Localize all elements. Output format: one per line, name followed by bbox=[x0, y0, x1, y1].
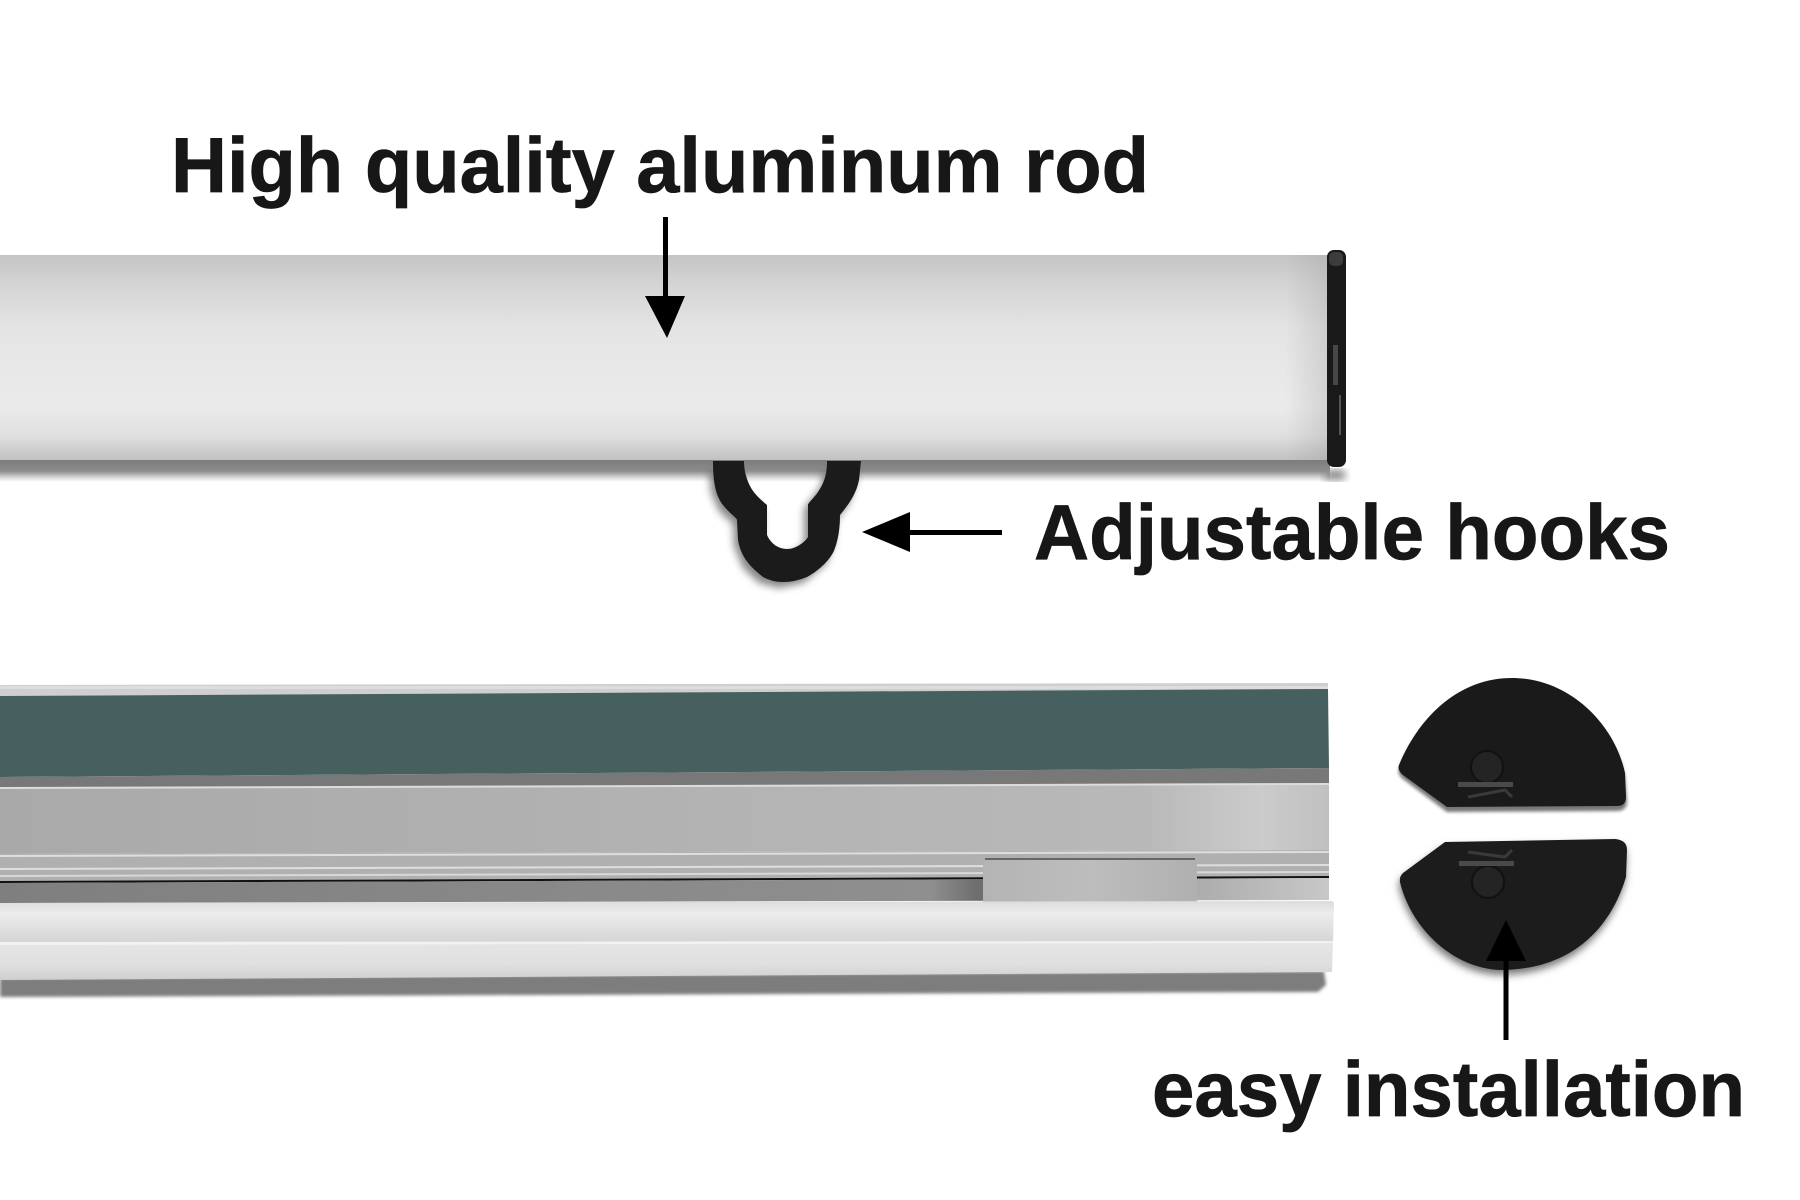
ribbed stripes bbox=[0, 850, 1329, 883]
white rail lower bbox=[0, 942, 1333, 980]
rod body bbox=[0, 255, 1328, 460]
aluminum rod bbox=[0, 250, 1346, 482]
teal fabric bbox=[0, 689, 1329, 777]
label: adjustable hooks: Adjustable hooks bbox=[1034, 488, 1670, 576]
label: easy installation: easy installation bbox=[1152, 1045, 1745, 1133]
dark gap bbox=[0, 768, 1329, 788]
sliding clip bbox=[983, 858, 1197, 902]
bottom rail assembly bbox=[0, 683, 1334, 997]
adjustable hook bbox=[709, 461, 861, 588]
arrow: to rod bbox=[645, 217, 685, 338]
rod shadow bbox=[0, 460, 1330, 482]
top light strip bbox=[0, 683, 1328, 697]
arrow: to hooks bbox=[862, 512, 1002, 552]
white rail upper bbox=[0, 901, 1334, 943]
title: high quality aluminum rod: High quality aluminum rod bbox=[171, 121, 1149, 209]
icon: bottom end piece bbox=[1399, 839, 1627, 975]
icon: top end piece bbox=[1398, 678, 1627, 812]
arrow: to end piece bbox=[1486, 920, 1526, 1040]
rod end cap bbox=[1324, 250, 1346, 480]
lower channel bbox=[0, 878, 1329, 903]
gray upper band bbox=[0, 784, 1329, 854]
rail shadow bbox=[0, 971, 1326, 997]
